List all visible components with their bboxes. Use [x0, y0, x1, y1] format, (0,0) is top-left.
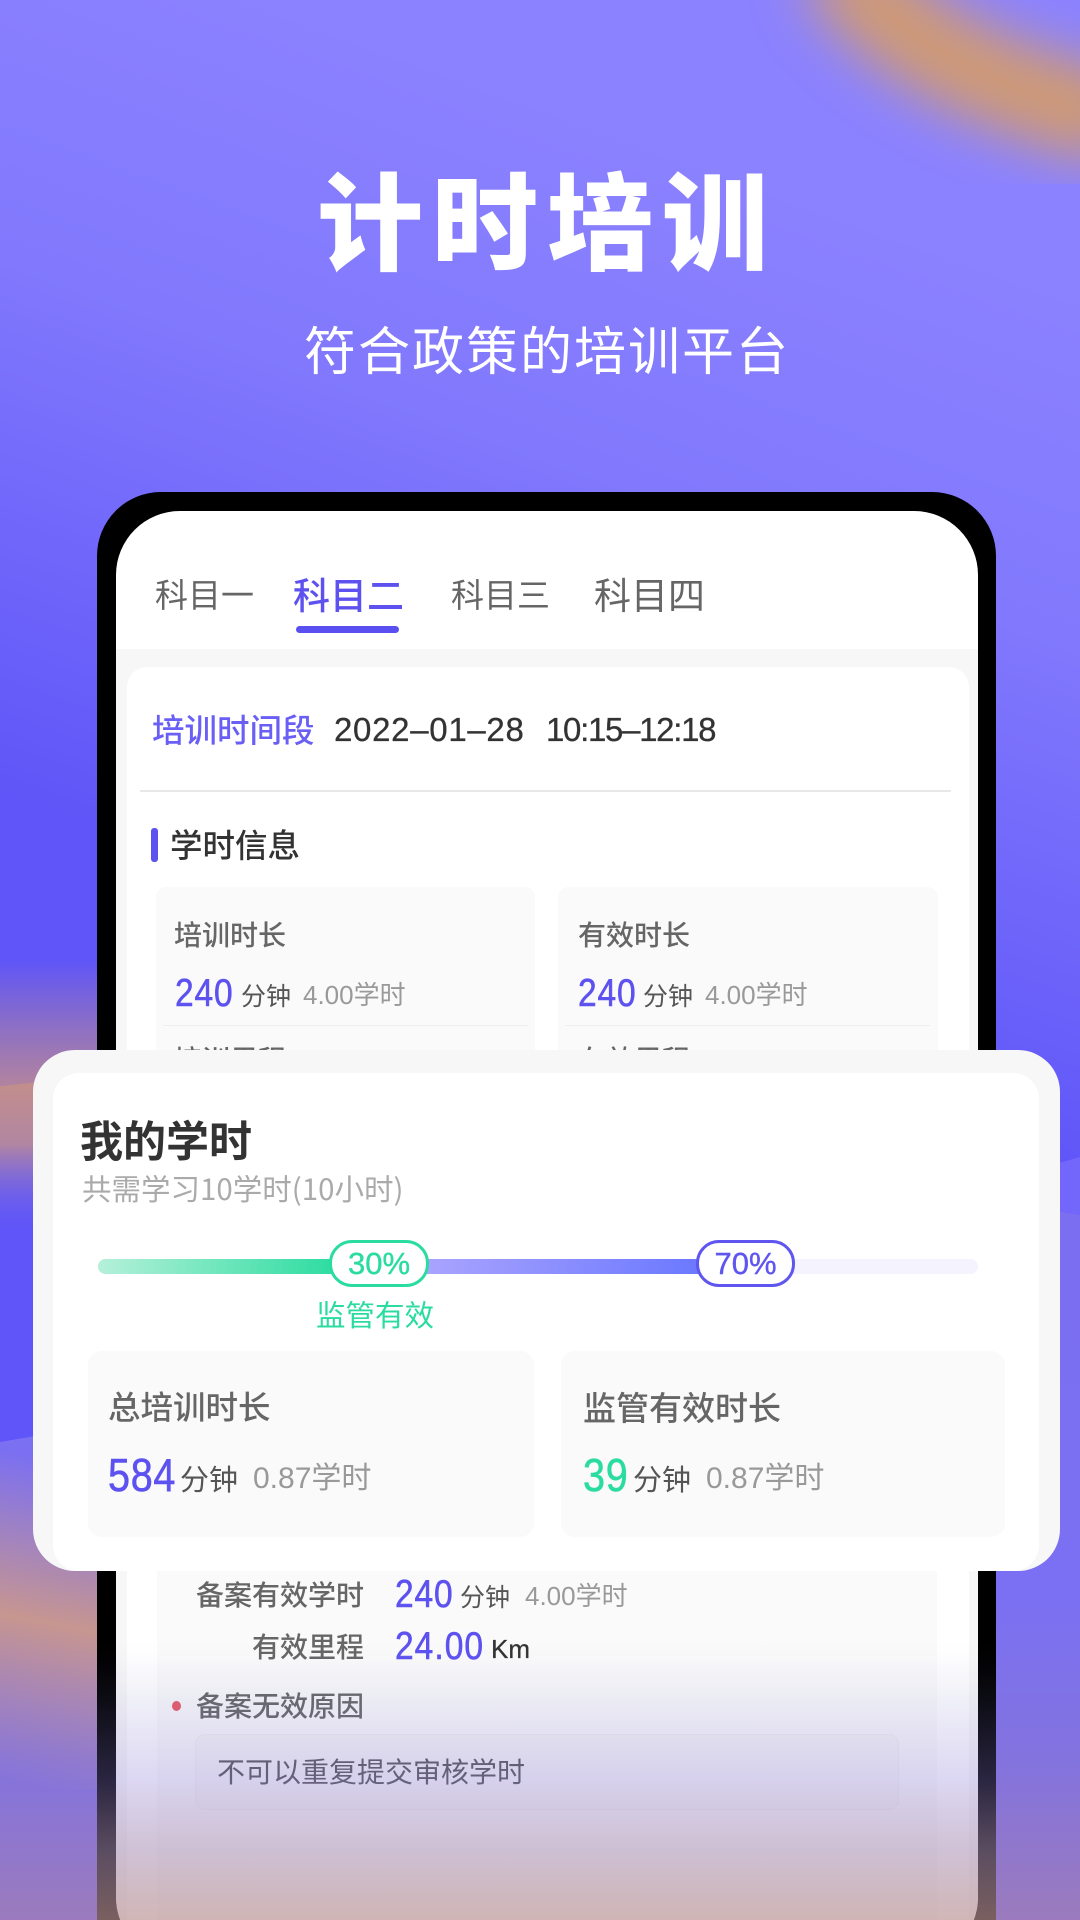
reason text: 不可以重复提交审核学时: [217, 1750, 525, 1790]
heading: 我的学时: [80, 1108, 252, 1170]
value: 24.00: [395, 1625, 484, 1668]
clipped label: 有效里程: [578, 1039, 690, 1079]
value: 240: [175, 972, 234, 1015]
tab: subject two active: 科目二: [293, 566, 404, 620]
label: 备案有效学时: [196, 1574, 364, 1614]
phone screen: [116, 511, 978, 1920]
hours: 0.87学时: [706, 1462, 824, 1495]
training date: 2022–01–28: [334, 711, 525, 748]
purple segment: [423, 1259, 703, 1274]
section heading: 学时信息: [170, 820, 300, 866]
label: 培训时长: [174, 914, 286, 954]
hours: 0.87学时: [253, 1462, 371, 1495]
bottom fade: [97, 1640, 996, 1920]
track: [98, 1259, 978, 1274]
card: total training duration: [88, 1351, 534, 1537]
inner white panel: [53, 1073, 1039, 1571]
subheading: 共需学习10学时(10小时): [82, 1166, 403, 1208]
hours: 4.00学时: [303, 980, 406, 1010]
card: supervised effective duration: [561, 1351, 1005, 1537]
value: 39: [583, 1449, 628, 1501]
value: 240: [578, 972, 637, 1015]
label: 监管有效时长: [583, 1382, 781, 1430]
section marker: [151, 828, 158, 862]
active tab underline: [296, 626, 399, 633]
unit: 分钟: [180, 1456, 238, 1498]
light wave lower area: [0, 1200, 1080, 1920]
tab: subject four: 科目四: [594, 566, 705, 620]
panel: my study hours: [33, 1050, 1060, 1571]
card: training duration: [156, 887, 535, 1287]
hours: 4.00学时: [705, 980, 808, 1010]
value: 584: [108, 1449, 176, 1501]
label: 备案无效原因: [196, 1685, 364, 1725]
tabs: [155, 566, 705, 633]
label: 有效时长: [578, 914, 690, 954]
training time: 10:15–12:18: [546, 711, 715, 748]
marker 30%: 30%: [348, 1246, 410, 1281]
unit: 分钟: [460, 1578, 510, 1614]
card: filed hours: [157, 1400, 937, 1920]
unit: Km: [491, 1634, 530, 1664]
label: 总培训时长: [108, 1382, 271, 1428]
unit: 分钟: [633, 1456, 691, 1498]
green segment: [98, 1259, 338, 1274]
panel: training details: [127, 667, 969, 1920]
title: 计时培训: [317, 139, 777, 293]
label: 有效里程: [252, 1626, 364, 1666]
supervised effective label: 监管有效: [316, 1292, 434, 1334]
card: effective duration: [558, 887, 938, 1287]
red dot: [172, 1701, 181, 1711]
value: 240: [395, 1573, 454, 1616]
subtitle: 符合政策的培训平台: [304, 310, 790, 385]
marker 30%: [329, 1240, 429, 1287]
orange left bands: [0, 960, 110, 1086]
unit: 分钟: [241, 977, 291, 1013]
clipped label: 培训里程: [174, 1039, 286, 1079]
training period label: 培训时间段: [152, 704, 315, 752]
tab: subject three: 科目三: [451, 568, 550, 616]
marker 70%: 70%: [714, 1246, 777, 1281]
progress bar: [98, 1240, 978, 1287]
reason box: [195, 1734, 899, 1810]
phone mockup: [97, 492, 996, 1920]
orange top-right band: [840, 0, 1080, 120]
hours: 4.00学时: [525, 1581, 628, 1611]
tab: subject one: 科目一: [155, 568, 254, 616]
unit: 分钟: [643, 977, 693, 1013]
marker 70%: [696, 1240, 795, 1287]
content background: [116, 649, 978, 1920]
